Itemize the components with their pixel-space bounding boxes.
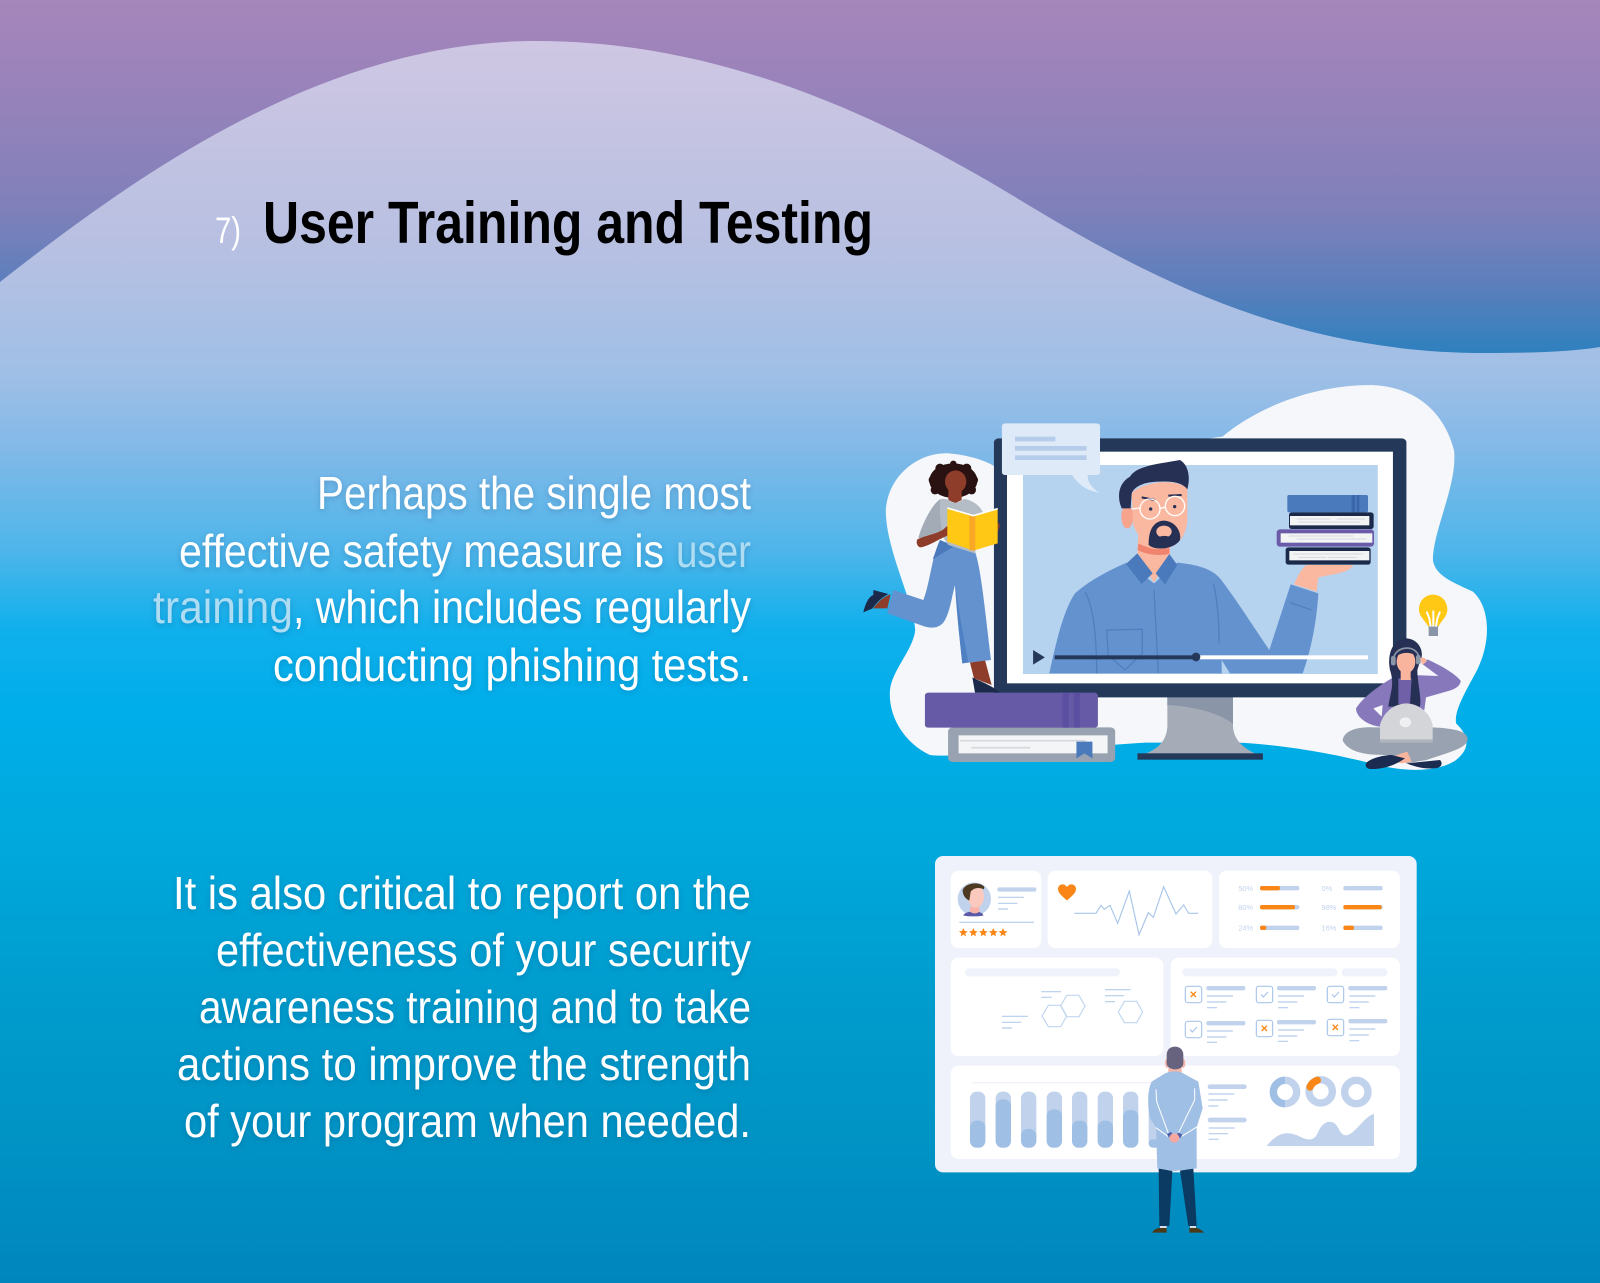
text block: user training: user	[676, 525, 751, 577]
video progress bar	[1055, 653, 1368, 661]
panel: progress bars: 50%	[1238, 884, 1253, 893]
text block: user training: training	[153, 581, 293, 633]
panel: progress bars: 16%	[1322, 923, 1337, 932]
woman with laptop	[1343, 638, 1468, 769]
speech bubble	[1002, 423, 1100, 493]
text block: reporting: effectiveness of your security	[216, 924, 751, 976]
heading: User Training and Testing	[263, 190, 873, 256]
text block: user training: , which includes regularly	[293, 581, 751, 633]
text block: reporting: of your program when needed.	[184, 1095, 751, 1147]
panel: heart rate	[1048, 871, 1212, 948]
background: purple to blue top band	[0, 0, 1600, 360]
panel: progress bars: 24%	[1238, 923, 1253, 932]
panel: checklist	[1171, 958, 1400, 1056]
light bulb	[1419, 595, 1447, 636]
instructor	[1049, 460, 1374, 673]
panel: progress bars	[1219, 871, 1400, 948]
panel: progress bars: 98%	[1322, 903, 1337, 912]
text block: reporting: actions to improve the strength	[177, 1038, 751, 1090]
illustration: online training video	[863, 385, 1487, 770]
panel: profile card	[951, 871, 1041, 948]
panel: progress bars: 80%	[1238, 903, 1253, 912]
play button	[1033, 650, 1045, 665]
panel: progress bars: 0%	[1322, 884, 1333, 893]
rating stars	[959, 928, 1007, 936]
text block: user training: effective safety measure is	[179, 525, 664, 577]
panel: bars, donuts and area chart	[951, 1066, 1400, 1159]
bar chart	[970, 1092, 1164, 1148]
section number: 7)	[215, 210, 241, 251]
man viewing dashboard	[1148, 1047, 1204, 1233]
stack of books on floor	[925, 693, 1115, 762]
text block: user training: conducting phishing tests.	[273, 639, 751, 691]
title	[215, 190, 873, 256]
text block: reporting: It is also critical to report on the	[173, 867, 751, 919]
open yellow book	[947, 507, 998, 551]
donut charts	[1273, 1080, 1368, 1104]
area chart	[1267, 1114, 1374, 1146]
monitor	[994, 438, 1406, 760]
text block: reporting	[173, 867, 751, 1147]
text block: user training	[153, 467, 751, 691]
panel: hexagon diagram	[951, 958, 1163, 1056]
dashboard board	[935, 856, 1417, 1172]
white blob backdrop	[886, 385, 1487, 770]
illustration: dashboard with man	[935, 856, 1417, 1233]
text block: user training: Perhaps the single most	[317, 467, 751, 519]
legend lines	[1208, 1084, 1247, 1139]
stack of books held by instructor	[1277, 495, 1374, 565]
text block: reporting: awareness training and to take	[199, 981, 751, 1033]
woman reading a book	[863, 461, 1000, 693]
